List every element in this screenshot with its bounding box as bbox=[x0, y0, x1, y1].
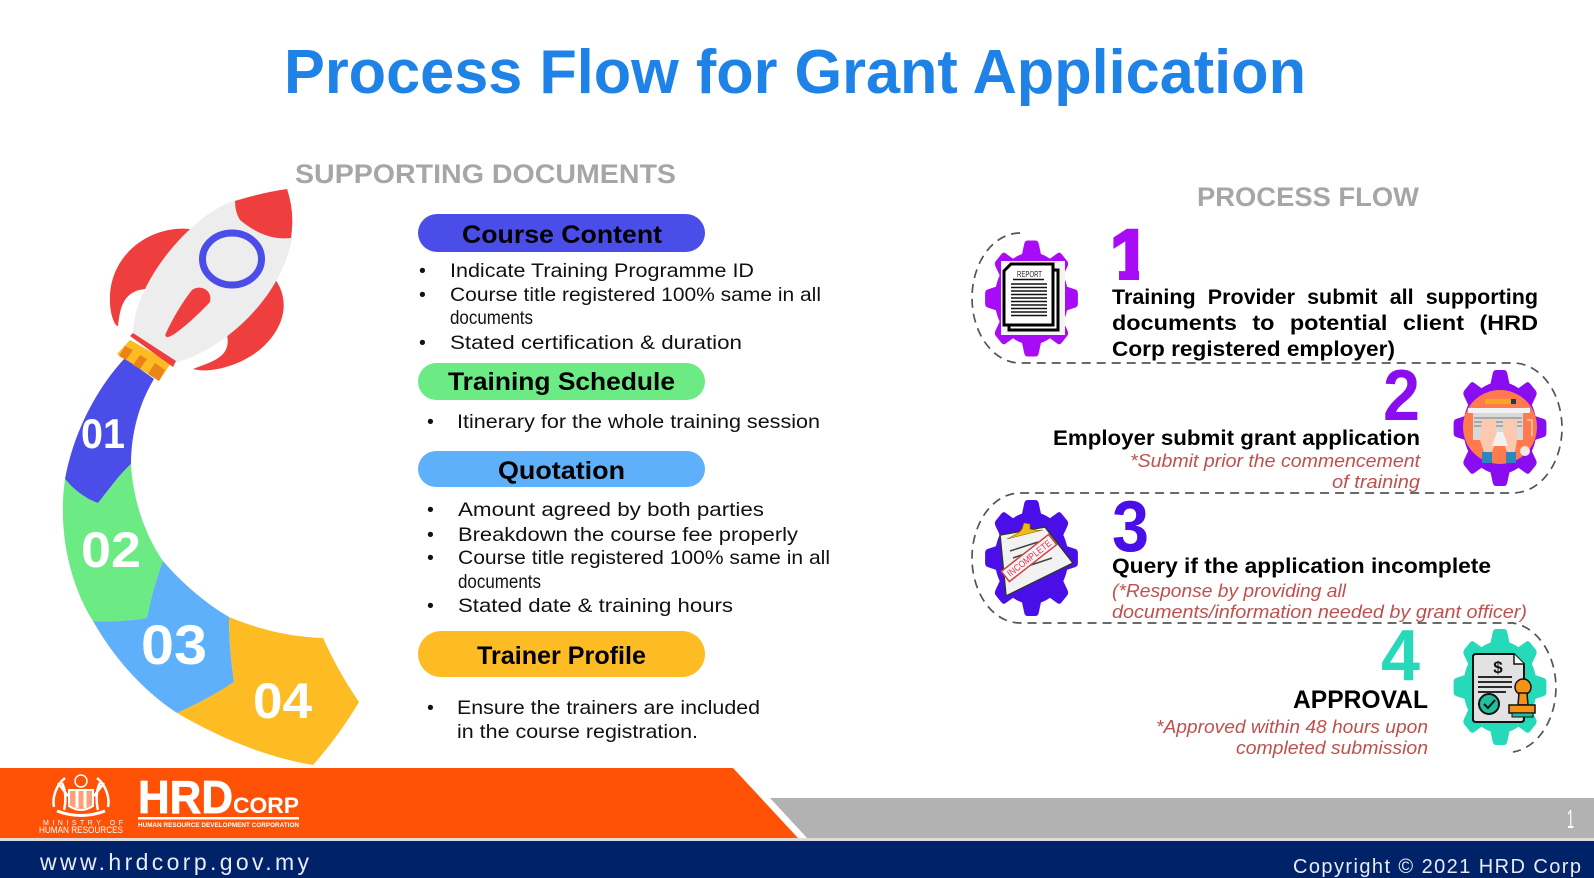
panel: training schedule bbox=[418, 363, 820, 433]
list: quotation bbox=[427, 499, 830, 617]
rocket ribbon bbox=[63, 358, 359, 765]
icon: approved document gear bbox=[1454, 629, 1546, 745]
ribbon segment 02: 02 bbox=[81, 522, 141, 578]
logo: ministry of human resources: MINISTRY OF bbox=[43, 820, 123, 827]
list: course content: Course title registered 100% same in all bbox=[450, 284, 821, 306]
list: quotation: Breakdown the course fee properly bbox=[458, 524, 798, 546]
icon: incomplete clipboard gear bbox=[985, 500, 1078, 616]
logo: HRD Corp bbox=[138, 771, 299, 829]
list: course content: • bbox=[419, 260, 426, 282]
ribbon segment 01: 01 bbox=[81, 410, 125, 457]
list: course content: • bbox=[419, 332, 426, 354]
panel: quotation bbox=[418, 451, 830, 617]
panel: course content bbox=[418, 214, 821, 354]
ribbon segment 04: 04 bbox=[253, 673, 312, 729]
icon: rocket bbox=[110, 189, 292, 381]
footer grey bar bbox=[0, 798, 1594, 841]
step number 3: 3 bbox=[1112, 487, 1149, 567]
list: quotation: Stated date & training hours bbox=[458, 595, 733, 617]
list: course content: Indicate Training Programme ID bbox=[450, 260, 754, 282]
list: quotation: • bbox=[427, 524, 434, 546]
ribbon segment 04 bbox=[177, 617, 359, 765]
step 3 description: Query if the application incomplete bbox=[1112, 555, 1491, 578]
list: trainer profile: Ensure the trainers are included bbox=[457, 697, 760, 719]
step 1 description: documents to potential client (HRD bbox=[1112, 312, 1538, 335]
pill: course content: Course Content bbox=[462, 221, 663, 249]
panel: step 4 bbox=[1156, 616, 1546, 758]
step 3 description: (*Response by providing all bbox=[1112, 580, 1347, 601]
panel: step 1 bbox=[985, 216, 1538, 361]
list: trainer profile: in the course registration. bbox=[457, 721, 698, 743]
logo: ministry of human resources: HUMAN RESOURCES bbox=[39, 825, 123, 835]
pill: training schedule: Training Schedule bbox=[448, 368, 675, 396]
logo: ministry of human resources bbox=[39, 775, 123, 835]
step number 1: 1 bbox=[1110, 216, 1150, 296]
list: quotation: Amount agreed by both parties bbox=[458, 499, 764, 521]
logo: HRD Corp: HRD bbox=[138, 771, 233, 823]
footer orange banner bbox=[0, 768, 798, 838]
footer navy bar: www.hrdcorp.gov.my bbox=[39, 849, 310, 875]
title: Process Flow for Grant Application bbox=[284, 38, 1306, 107]
footer navy bar: Copyright © 2021 HRD Corp bbox=[1293, 856, 1581, 878]
pill: quotation: Quotation bbox=[498, 457, 625, 485]
step 4 description: APPROVAL bbox=[1293, 686, 1428, 714]
step number 4: 4 bbox=[1381, 616, 1420, 696]
icon: report gear bbox=[985, 240, 1078, 356]
panel: step 2 bbox=[1053, 356, 1546, 492]
list: quotation: documents bbox=[458, 571, 541, 593]
list: quotation: • bbox=[427, 547, 434, 569]
list: training schedule: • bbox=[427, 411, 434, 433]
list: training schedule: Itinerary for the whole training session bbox=[457, 411, 820, 433]
logo: HRD Corp: HUMAN RESOURCE DEVELOPMENT CORPORATION bbox=[138, 823, 299, 829]
logo: HRD Corp: CORP bbox=[233, 793, 299, 818]
icon: incomplete clipboard gear: INCOMPLETE bbox=[1005, 538, 1054, 579]
step 1 description bbox=[1112, 286, 1538, 361]
list: course content: Stated certification & duration bbox=[450, 332, 742, 354]
ribbon segment 03 bbox=[93, 561, 234, 713]
step 1 description: Corp registered employer) bbox=[1112, 338, 1395, 361]
panel: step 3 bbox=[985, 487, 1527, 622]
step 2 description bbox=[1053, 427, 1421, 492]
pill: course content bbox=[418, 214, 705, 252]
step number 2: 2 bbox=[1383, 356, 1420, 436]
list: course content: documents bbox=[450, 307, 533, 329]
list: trainer profile bbox=[427, 697, 760, 743]
list: course content: • bbox=[419, 284, 426, 306]
step 4 description bbox=[1156, 686, 1428, 758]
icon: report gear: REPORT bbox=[1017, 270, 1042, 279]
heading: supporting documents: SUPPORTING DOCUMENTS bbox=[295, 159, 676, 189]
step 3 description: documents/information needed by grant officer) bbox=[1112, 601, 1527, 622]
icon: laptop gear bbox=[1454, 370, 1546, 486]
list: quotation: • bbox=[427, 499, 434, 521]
footer grey bar: 1 bbox=[1567, 804, 1574, 834]
step 4 description: completed submission bbox=[1236, 737, 1428, 758]
step 2 description: Employer submit grant application bbox=[1053, 427, 1420, 450]
ribbon segment 02 bbox=[63, 464, 163, 621]
list: course content bbox=[419, 260, 821, 354]
ribbon segment 01 bbox=[65, 358, 154, 503]
heading: process flow: PROCESS FLOW bbox=[1197, 182, 1420, 212]
pill: trainer profile: Trainer Profile bbox=[477, 642, 646, 670]
panel: trainer profile bbox=[418, 631, 760, 743]
icon: approved document gear: $ bbox=[1493, 658, 1503, 677]
pill: quotation bbox=[418, 451, 705, 487]
step 3 description bbox=[1112, 555, 1527, 622]
list: quotation: • bbox=[427, 595, 434, 617]
pill: training schedule bbox=[418, 363, 705, 400]
step 2 description: *Submit prior the commencement bbox=[1130, 450, 1421, 471]
step 2 description: of training bbox=[1332, 471, 1421, 492]
step 1 description: Training Provider submit all supporting bbox=[1112, 286, 1538, 309]
pill: trainer profile bbox=[418, 631, 705, 677]
ribbon segment 03: 03 bbox=[141, 613, 207, 676]
step 4 description: *Approved within 48 hours upon bbox=[1156, 716, 1428, 737]
list: trainer profile: • bbox=[427, 697, 434, 719]
dashed connector path bbox=[972, 233, 1562, 752]
footer navy bar bbox=[0, 841, 1594, 878]
list: quotation: Course title registered 100% same in all bbox=[458, 547, 830, 569]
